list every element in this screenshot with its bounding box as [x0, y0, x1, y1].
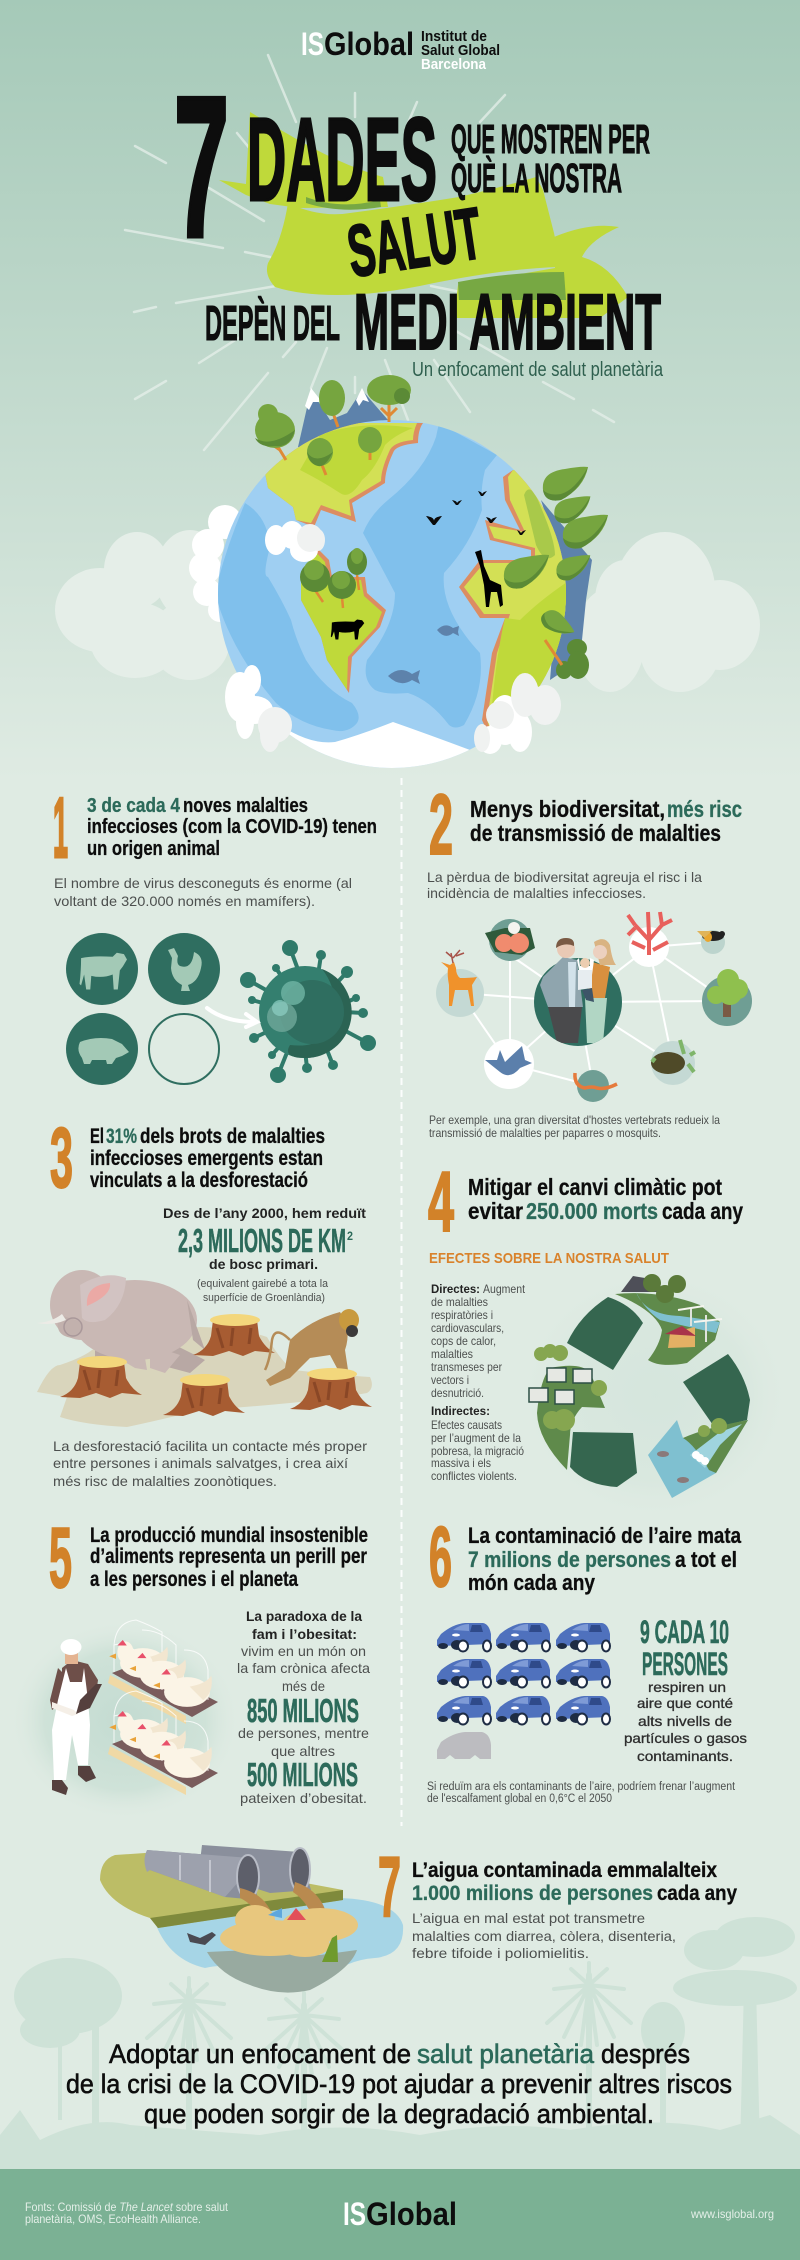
footnote: Si reduïm ara els contaminants de l’aire, podríem frenar l’augment — [427, 1781, 736, 1793]
heading: 7 milions de persones — [468, 1547, 671, 1572]
title: QUÈ LA NOSTRA — [451, 155, 622, 201]
farm illustration — [10, 1620, 240, 1820]
forest silhouette background — [0, 1917, 800, 2169]
effects text: Efectes causats — [431, 1418, 502, 1432]
conclusion: salut planetària — [417, 2039, 595, 2069]
sources: planetària, OMS, EcoHealth Alliance. — [25, 2212, 201, 2226]
heading: cada any — [662, 1198, 743, 1224]
effects text: conflictes violents. — [431, 1469, 517, 1483]
paradox text: la fam crònica afecta — [237, 1660, 370, 1676]
heading — [468, 1523, 742, 1595]
icon: turtle — [651, 1040, 695, 1085]
effects text: pobresa, la migració — [431, 1444, 524, 1458]
ribbon banner — [219, 112, 628, 318]
paradox text: que altres — [271, 1743, 335, 1759]
stat text — [163, 1205, 366, 1304]
conclusion: que poden sorgir de la degradació ambiental. — [144, 2099, 654, 2129]
effects text — [431, 1282, 526, 1483]
footnote: transmissió de malalties per paparres o mosquits. — [429, 1126, 661, 1140]
central family — [534, 938, 622, 1046]
heading: a tot el — [675, 1547, 737, 1572]
ice cap — [290, 722, 470, 768]
footnote — [427, 1781, 736, 1805]
paradox text: vivim en un món on — [241, 1643, 366, 1659]
heading: evitar — [468, 1198, 523, 1224]
trees: north america — [270, 400, 397, 475]
heading — [470, 796, 742, 846]
effluent — [240, 1888, 275, 1925]
paradox text: 500 MILIONS — [247, 1756, 358, 1793]
sea — [218, 420, 566, 768]
logo: ISGlobal footer: IS — [343, 2196, 366, 2232]
heading — [90, 1125, 325, 1192]
logo: ISGlobal top: Barcelona — [421, 56, 487, 73]
birds — [426, 491, 526, 535]
decorative rays — [125, 55, 614, 450]
website: www.isglobal.org — [690, 2207, 774, 2221]
stat: alts nivells de — [638, 1713, 732, 1729]
logo: ISGlobal top: Institut de — [421, 28, 487, 45]
recycling illustration — [520, 1270, 790, 1520]
heading: més risc — [667, 796, 742, 822]
logo: ISGlobal top: IS — [301, 26, 324, 62]
body text: entre persones i animals salvatges, i crea així — [53, 1455, 348, 1471]
body text: L’aigua en mal estat pot transmetre — [412, 1910, 645, 1926]
logo: ISGlobal top: Global — [324, 26, 414, 62]
conclusion: Adoptar un enfocament de — [109, 2039, 411, 2069]
water corner — [648, 1418, 748, 1498]
effects text: cops de calor, — [431, 1334, 496, 1348]
icon: tree — [702, 969, 752, 1026]
stat: 9 CADA 10 — [640, 1614, 729, 1650]
heading: a les persones i el planeta — [90, 1568, 298, 1591]
stat — [624, 1614, 747, 1764]
effects text: transmeses per — [431, 1360, 502, 1374]
heading: Menys biodiversitat, — [470, 796, 665, 822]
heading: 1.000 milions de persones — [412, 1882, 653, 1905]
car pictogram — [437, 1623, 610, 1759]
heading: vinculats a la desforestació — [90, 1169, 308, 1192]
body text — [54, 875, 352, 909]
effects text: malalties — [431, 1347, 473, 1361]
panel: fact 3 — [37, 1111, 372, 1489]
icon: deer — [436, 950, 484, 1017]
title: DADES — [247, 94, 437, 226]
subtitle: Un enfocament de salut planetària — [412, 359, 664, 381]
heading: El — [90, 1125, 104, 1148]
heading — [87, 795, 377, 860]
stat text: de bosc primari. — [209, 1256, 318, 1272]
effects text: Augment — [483, 1282, 526, 1296]
stat text: Des de l’any 2000, hem reduït — [163, 1205, 366, 1221]
logo: ISGlobal top — [301, 26, 500, 73]
sources: Fonts: Comissió de The Lancet sobre salut — [25, 2200, 229, 2214]
paradox text: 850 MILIONS — [247, 1692, 359, 1729]
number 4: 4 — [428, 1155, 454, 1250]
effects text: de malalties — [431, 1295, 488, 1309]
title: DEPÈN DEL — [205, 297, 340, 351]
stat: respiren un — [648, 1679, 726, 1695]
heading: d’aliments representa un perill per — [90, 1545, 367, 1568]
farmer — [50, 1639, 102, 1795]
title: 7 — [174, 56, 229, 279]
heading — [90, 1524, 368, 1591]
stat text: (equivalent gairebé a tota la — [197, 1278, 329, 1290]
water pollution illustration — [100, 1845, 403, 1993]
white clouds behind globe — [189, 505, 242, 622]
heading: La producció mundial insostenible — [90, 1524, 368, 1547]
heading — [412, 1859, 737, 1905]
sources — [25, 2200, 229, 2226]
body text: malalties com diarrea, còlera, disenteria, — [412, 1928, 676, 1944]
icon: cow — [66, 933, 138, 1005]
body text — [412, 1910, 676, 1961]
paradox text: de persones, mentre — [238, 1725, 369, 1741]
paradox text — [237, 1608, 370, 1806]
effects text: vectors i — [431, 1373, 469, 1387]
panel: fact 5 — [10, 1511, 370, 1820]
icon: coral — [628, 912, 672, 967]
stat text: superfície de Groenlàndia) — [203, 1292, 325, 1304]
panel: fact 1 — [53, 781, 377, 1085]
back clouds — [55, 530, 760, 692]
body text: febre tifoide i poliomielitis. — [412, 1945, 589, 1961]
trees: right — [504, 467, 608, 644]
dark arrow segments — [567, 1297, 750, 1487]
number 2: 2 — [429, 778, 453, 873]
heading — [468, 1174, 743, 1224]
body text: La desforestació facilita un contacte més proper — [53, 1438, 367, 1454]
icon: empty circle — [149, 1014, 219, 1084]
effects text: cardiovasculars, — [431, 1321, 504, 1335]
divider — [400, 778, 402, 1826]
elephant — [37, 1270, 205, 1373]
title — [174, 56, 661, 366]
stat: contaminants. — [637, 1748, 733, 1764]
heading: món cada any — [468, 1570, 596, 1595]
footnote: de l'escalfament global en 0,6°C el 2050 — [427, 1793, 612, 1805]
conclusion: després — [601, 2039, 690, 2069]
logo: ISGlobal top: Salut Global — [421, 42, 500, 59]
paradox text: pateixen d’obesitat. — [240, 1790, 367, 1806]
body text: més risc de malalties zoonòtiques. — [53, 1473, 277, 1489]
heading: noves malalties — [183, 795, 308, 817]
body text: El nombre de virus desconeguts és enorme (al — [54, 875, 352, 891]
paradox text: fam i l’obesitat: — [252, 1626, 357, 1642]
heading: infeccioses (com la COVID-19) tenen — [87, 816, 377, 838]
animal: giraffe — [475, 550, 503, 607]
effects text: Indirectes: — [431, 1404, 490, 1418]
heading: 31% — [106, 1125, 137, 1148]
stat: aire que conté — [637, 1695, 733, 1711]
heading: un origen animal — [87, 838, 220, 860]
effects text: Directes: — [431, 1282, 480, 1296]
panel: fact 6 — [427, 1510, 747, 1805]
panel: fact 7: 7 — [378, 1840, 401, 1935]
icon: flower — [485, 919, 535, 961]
paradox text: La paradoxa de la — [246, 1608, 362, 1624]
animal: cow — [331, 619, 364, 639]
globe illustration — [55, 375, 760, 790]
heading: L’aigua contaminada emmalalteix — [412, 1859, 717, 1882]
deforestation illustration — [37, 1270, 372, 1427]
heading: 250.000 morts — [526, 1198, 658, 1224]
heading: La contaminació de l’aire mata — [468, 1523, 742, 1548]
small cloud on land — [265, 521, 318, 562]
icon: bee — [697, 930, 725, 954]
effects text: desnutrició. — [431, 1386, 484, 1400]
icon: hen — [148, 933, 220, 1005]
heading: 3 de cada 4 — [87, 795, 181, 817]
heading: cada any — [657, 1882, 737, 1905]
conclusion: de la crisi de la COVID-19 pot ajudar a prevenir altres riscos — [66, 2069, 732, 2099]
body text: voltant de 320.000 només en mamífers). — [54, 893, 315, 909]
fish — [388, 625, 459, 684]
land: north america — [265, 423, 423, 527]
land: south america — [301, 547, 386, 693]
panel: fact 6: 6 — [429, 1510, 452, 1605]
icon: bird — [484, 1039, 534, 1089]
footer — [0, 2169, 800, 2260]
panel: fact 5: 5 — [49, 1511, 72, 1606]
effects text: per l’augment de la — [431, 1431, 521, 1445]
conclusion — [66, 2039, 732, 2129]
panel: fact 7 — [100, 1840, 737, 1993]
panel: fact 2 — [427, 778, 752, 1140]
icon: pig — [66, 1013, 138, 1085]
panel: fact 1: 1 — [53, 781, 68, 876]
body text — [53, 1438, 367, 1489]
panel: fact 3: 3 — [50, 1111, 73, 1206]
effects text: respiratòries i — [431, 1308, 493, 1322]
title: SALUT — [342, 193, 487, 293]
network diagram — [436, 912, 752, 1102]
arrow — [207, 1008, 257, 1027]
logo: ISGlobal footer: Global — [366, 2196, 457, 2232]
stat: partícules o gasos — [624, 1730, 747, 1746]
body text: incidència de malalties infeccioses. — [427, 885, 646, 901]
monkey — [265, 1309, 359, 1386]
mountains — [298, 388, 592, 680]
icon: virus — [240, 940, 376, 1083]
heading: de transmissió de malalties — [470, 820, 721, 846]
body text: La pèrdua de biodiversitat agreuja el risc i la — [427, 869, 702, 885]
heading: Mitigar el canvi climàtic pot — [468, 1174, 722, 1200]
effects text: massiva i els — [431, 1456, 491, 1470]
paradox text: més de — [282, 1678, 325, 1694]
footnote — [429, 1113, 720, 1140]
land: africa — [459, 470, 566, 727]
panel: fact 4 — [428, 1155, 790, 1520]
top land — [615, 1274, 722, 1365]
trees: south america — [315, 575, 359, 608]
heading: infeccioses emergents estan — [90, 1147, 323, 1170]
icon: worm — [575, 1070, 617, 1102]
left land with solar panels — [529, 1344, 607, 1470]
footnote: Per exemple, una gran diversitat d'hostes vertebrats redueix la — [429, 1113, 720, 1127]
stat text: 2,3 MILIONS DE KM — [178, 1222, 346, 1259]
bottom clouds — [225, 665, 273, 739]
stat text: 2 — [347, 1229, 353, 1243]
subheading: EFECTES SOBRE LA NOSTRA SALUT — [429, 1250, 669, 1267]
pipes — [144, 1845, 311, 1900]
heading: dels brots de malalties — [140, 1125, 325, 1148]
body text — [427, 869, 702, 901]
